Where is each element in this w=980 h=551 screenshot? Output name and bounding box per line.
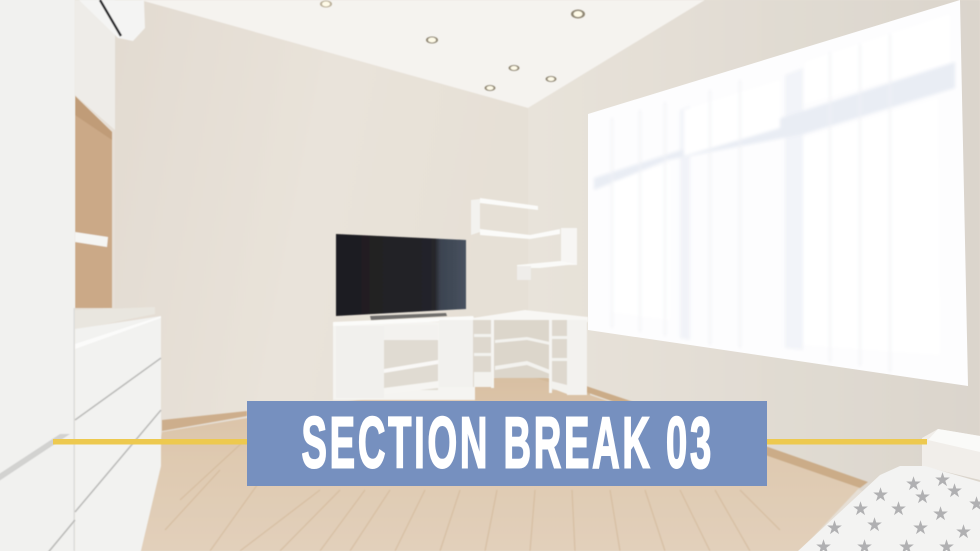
bed with star sheet: ★ [905,474,922,495]
back wall [115,0,528,430]
bed with star sheet [798,429,980,551]
curtain pleats [612,34,890,372]
bed with star sheet: ★ [946,481,963,502]
bed with star sheet: ★ [932,504,949,525]
title banner [247,401,767,486]
ceiling spotlights [320,0,585,91]
bed with star sheet: ★ [826,518,843,539]
baseboard right [586,386,868,488]
bed with star sheet: ★ [866,515,883,536]
window frames [594,62,955,350]
bed with star sheet: ★ [852,499,869,520]
corner desk [473,310,588,322]
yellow line right [767,439,927,444]
wood wall panel [75,96,112,308]
tall white cabinet [0,0,75,551]
air conditioner [79,0,145,41]
bed with star sheet: ★ [872,485,889,506]
bed with star sheet: ★ [912,518,929,539]
window with sheer curtain [588,0,968,386]
side wall near air conditioner [75,0,115,130]
yellow line left [53,439,247,444]
bed with star sheet: ★ [934,470,951,491]
wall shelves [471,198,577,280]
white drawer chest [46,307,161,551]
right wall [528,0,980,551]
television [336,234,466,320]
ceiling [140,0,705,108]
baseboard left [162,411,247,431]
bed with star sheet: ★ [890,499,907,520]
tv stand and corner desk [333,310,588,400]
title text: SECTION BREAK 03 [302,404,711,484]
bed with star sheet: ★ [955,522,972,543]
bed with star sheet: ★ [914,487,931,508]
floor [140,372,868,551]
